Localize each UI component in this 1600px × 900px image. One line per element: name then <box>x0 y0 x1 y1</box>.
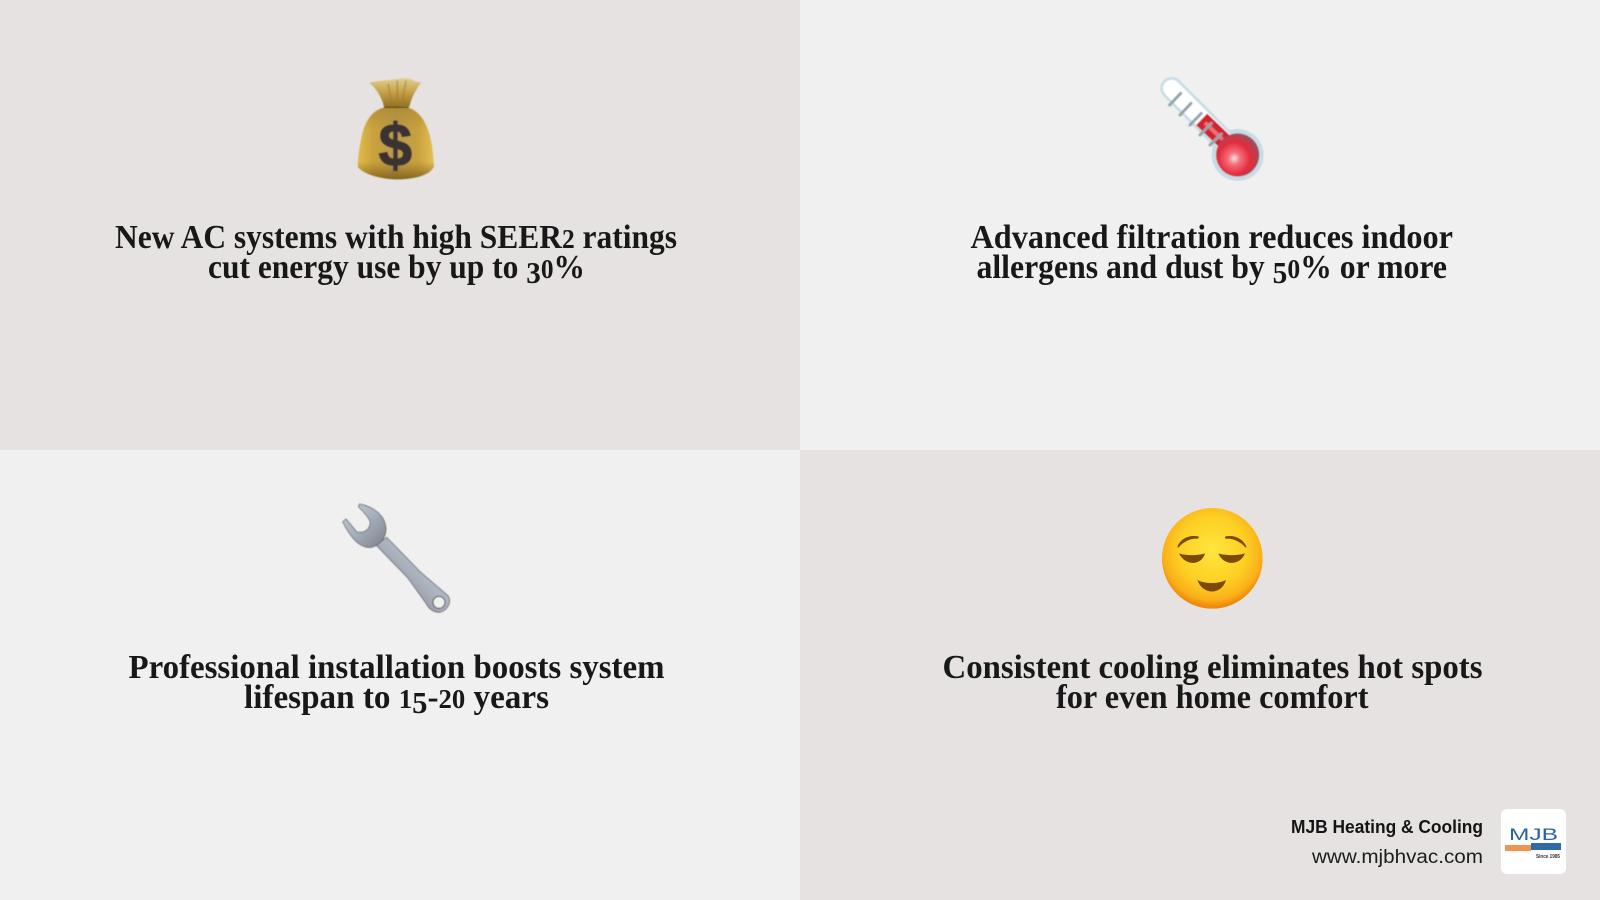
heading: energy savings: 3 <box>526 255 541 290</box>
icon: money bag <box>358 78 434 179</box>
heading: air filtration: allergens and dust by <box>976 249 1281 286</box>
panel: air filtration <box>800 0 1600 450</box>
logo <box>1501 809 1566 874</box>
heading: system lifespan: 20 years <box>438 679 550 716</box>
heading: energy savings: cut energy use by up to <box>208 249 538 286</box>
logo: MJB <box>1509 825 1558 844</box>
heading: system lifespan: lifespan to 1 <box>244 679 412 716</box>
heading: air filtration: Advanced filtration reduces indoor <box>970 219 1453 256</box>
logo: Since 1985 <box>1536 854 1560 860</box>
icon: thermometer <box>1170 88 1264 181</box>
company name: MJB Heating & Cooling <box>1291 817 1483 837</box>
heading: air filtration: 0 <box>1287 254 1300 284</box>
heading: energy savings: New AC systems with high SEER2 ratings <box>115 219 677 256</box>
heading: energy savings: % <box>554 249 587 286</box>
heading: home comfort: Consistent cooling eliminates hot spots <box>942 649 1482 686</box>
brand block <box>1291 809 1566 874</box>
icon: money bag: $ <box>379 112 412 179</box>
panel: energy savings <box>0 0 800 450</box>
heading: system lifespan: 5 <box>412 685 427 720</box>
panel: home comfort <box>800 450 1600 900</box>
heading: air filtration: % or more <box>1300 249 1455 286</box>
heading: system lifespan: Professional installation boosts system <box>128 649 665 686</box>
heading: home comfort: for even home comfort <box>1056 679 1369 716</box>
heading: air filtration: 5 <box>1273 255 1287 290</box>
heading: system lifespan <box>128 649 665 720</box>
website: www.mjbhvac.com <box>1311 847 1483 868</box>
icon: wrench <box>343 504 450 612</box>
heading: energy savings <box>115 219 677 290</box>
heading: energy savings: 0 <box>541 254 554 284</box>
heading: air filtration <box>970 219 1453 290</box>
panel: system lifespan <box>0 450 800 900</box>
heading: system lifespan: - <box>427 679 438 716</box>
icon: relieved face <box>1162 508 1263 609</box>
heading: home comfort <box>942 649 1482 716</box>
